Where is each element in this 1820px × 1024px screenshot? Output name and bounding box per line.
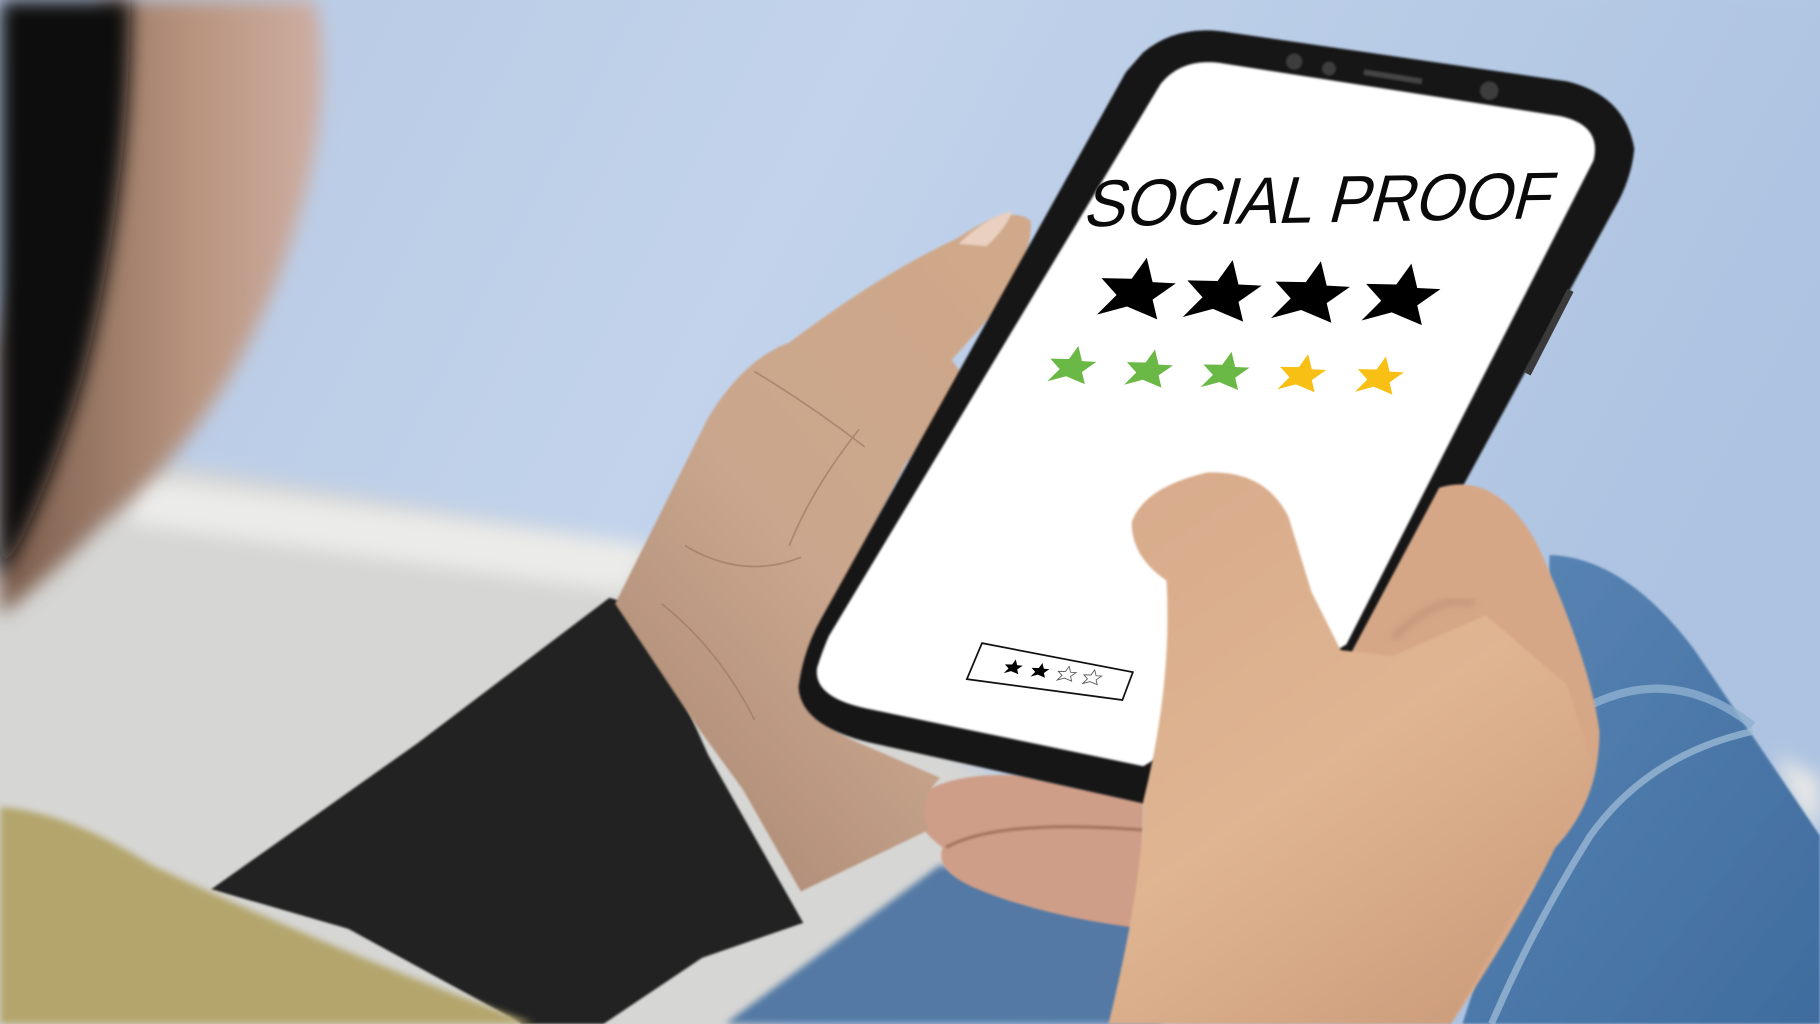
person: black sleeve bbox=[211, 598, 803, 1024]
phone screen bbox=[817, 62, 1595, 766]
phone notch: cameras and speaker bbox=[1286, 54, 1498, 100]
person: head and hair bbox=[0, 0, 322, 615]
small rating box bbox=[967, 643, 1133, 700]
heading: SOCIAL PROOF bbox=[1078, 159, 1564, 241]
phone body bbox=[799, 30, 1634, 803]
left palm creases bbox=[662, 372, 865, 720]
right hand bbox=[1108, 472, 1599, 1024]
person: yellow shirt shoulder bbox=[0, 807, 534, 1024]
left hand bbox=[615, 215, 1031, 892]
right hand knuckle shadow bbox=[1393, 601, 1474, 639]
jeans bbox=[725, 555, 1820, 1024]
left thumbnail bbox=[959, 211, 1012, 246]
colored star rating bbox=[1047, 346, 1404, 395]
left hand fingers under phone bbox=[916, 775, 1143, 929]
black star rating bbox=[1097, 258, 1440, 325]
background: white sofa bbox=[0, 466, 1820, 1024]
phone side button bbox=[1528, 290, 1570, 374]
